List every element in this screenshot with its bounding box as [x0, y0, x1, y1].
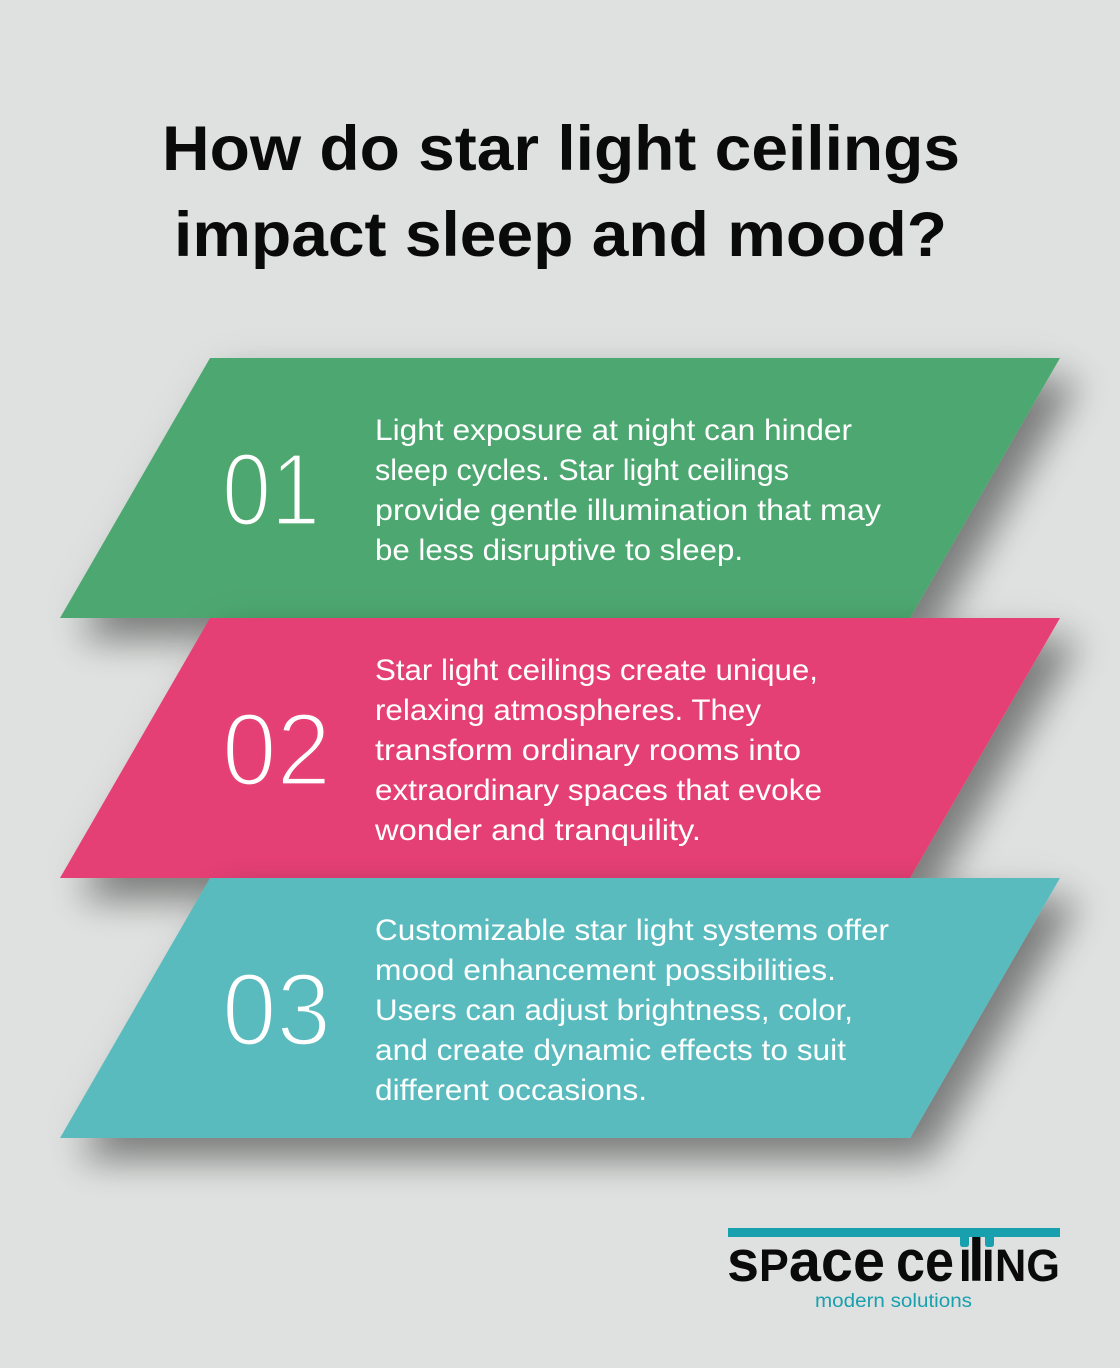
text: step 01: be less disruptive to sleep. — [375, 534, 743, 567]
text: step 03: mood enhancement possibilities. — [375, 954, 836, 987]
text: step 03: Customizable star light systems offer — [375, 914, 889, 947]
text: step 02: Star light ceilings create unique, — [375, 654, 818, 687]
text: step 03 — [375, 914, 889, 1107]
text: step 03: and create dynamic effects to suit — [375, 1034, 847, 1067]
title: impact sleep and mood? — [174, 200, 947, 270]
text: step 02: extraordinary spaces that evoke — [375, 774, 822, 807]
text: step 01: Light exposure at night can hinder — [375, 414, 852, 447]
logo tagline: modern solutions — [815, 1291, 972, 1312]
logo wordmark: NG — [995, 1240, 1060, 1291]
text: step 01: sleep cycles. Star light ceilings — [375, 454, 789, 487]
logo ceiling bar — [728, 1228, 1060, 1247]
logo wordmark: I — [959, 1240, 972, 1291]
pink parallelogram — [60, 618, 1060, 878]
text: step 02: transform ordinary rooms into — [375, 734, 801, 767]
green parallelogram — [60, 358, 1060, 618]
panel: step 01 — [60, 358, 1060, 618]
text: step 03: Users can adjust brightness, color, — [375, 994, 853, 1027]
teal parallelogram — [60, 878, 1060, 1138]
text: step 01 — [375, 414, 881, 567]
text: step 02: relaxing atmospheres. They — [375, 694, 761, 727]
text: step 02 — [374, 654, 822, 847]
text: step 03: different occasions. — [375, 1074, 647, 1107]
logo wordmark — [727, 1227, 1060, 1294]
number 01: 01 — [222, 432, 320, 547]
logo wordmark: ce — [896, 1229, 954, 1294]
text: step 01: provide gentle illumination that may — [375, 494, 881, 527]
title: How do star light ceilings — [162, 114, 960, 184]
panel: step 03 — [60, 878, 1060, 1138]
number 02: 02 — [222, 692, 331, 807]
logo wordmark: sPace — [727, 1229, 885, 1294]
title — [162, 114, 960, 270]
panel: step 02 — [60, 618, 1060, 878]
logo wordmark: l — [968, 1227, 985, 1294]
text: step 02: wonder and tranquility. — [374, 814, 701, 847]
number 03: 03 — [222, 952, 331, 1067]
logo: Space Ceiling — [727, 1227, 1060, 1312]
logo wordmark: I — [982, 1240, 995, 1291]
